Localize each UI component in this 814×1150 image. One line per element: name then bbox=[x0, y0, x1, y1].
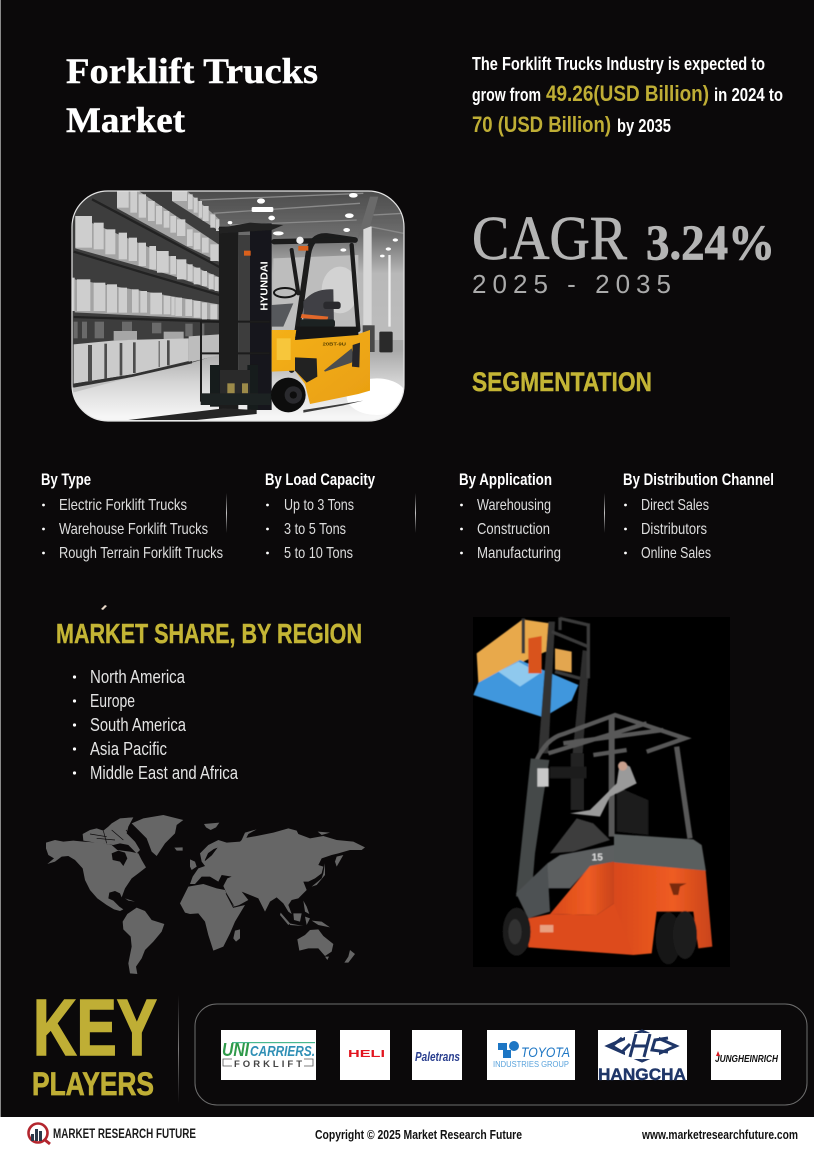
columns and wall bbox=[273, 255, 358, 272]
logo: Toyota Industries bbox=[487, 1030, 575, 1080]
seat bbox=[303, 289, 334, 320]
logo: Hangcha bbox=[598, 1030, 687, 1084]
title bbox=[66, 51, 318, 140]
segmentation column: by load capacity bbox=[265, 470, 375, 562]
wheels bbox=[503, 908, 531, 956]
segmentation column: by type: Warehouse Forklift Trucks bbox=[59, 521, 208, 538]
cab post and body bbox=[516, 758, 549, 897]
logo: Paletrans: Paletrans bbox=[415, 1049, 460, 1064]
segmentation column: by type: Electric Forklift Trucks bbox=[59, 497, 187, 514]
wheel bbox=[271, 378, 306, 412]
floor pallets bbox=[189, 334, 219, 363]
logo: UniCarriers: FORKLIFT bbox=[234, 1059, 302, 1070]
logo: Toyota Industries: INDUSTRIES GROUP bbox=[493, 1060, 569, 1069]
segmentation column: by distribution channel: By Distribution Channel bbox=[623, 470, 774, 489]
logo: Toyota Industries: TOYOTA bbox=[521, 1044, 570, 1060]
warehouse racks bbox=[72, 191, 219, 388]
region list: North America bbox=[90, 667, 186, 687]
segmentation column: by distribution channel: Direct Sales bbox=[641, 497, 709, 514]
region list bbox=[73, 667, 239, 783]
overhead guard bbox=[274, 236, 358, 370]
segmentation column: by distribution channel: Online Sales bbox=[641, 545, 711, 562]
segmentation column: by application: Construction bbox=[477, 521, 550, 538]
heading: market share by region: MARKET SHARE, BY REGION bbox=[56, 618, 362, 649]
ceiling beams bbox=[200, 193, 403, 233]
segmentation column: by distribution channel: Distributors bbox=[641, 521, 707, 538]
segmentation column: by type bbox=[41, 470, 223, 562]
footer band bbox=[0, 1117, 814, 1150]
logo: UniCarriers: CARRIERS. bbox=[250, 1043, 315, 1060]
title: Forklift Trucks bbox=[66, 51, 318, 91]
segmentation column: by application: Manufacturing bbox=[477, 545, 561, 562]
intro text: market forecast: 49.26(USD Billion) bbox=[546, 81, 709, 106]
segmentation column: by load capacity: By Load Capacity bbox=[265, 470, 375, 489]
logo: UniCarriers bbox=[221, 1030, 316, 1080]
ceiling lights bbox=[228, 193, 398, 257]
driver and seat bbox=[617, 787, 648, 835]
panel: key player logos bbox=[195, 1004, 807, 1105]
CAGR statistic bbox=[472, 205, 775, 299]
segmentation column: by distribution channel bbox=[623, 470, 774, 562]
load bbox=[477, 619, 553, 683]
CAGR statistic: 2025 - 2035 bbox=[472, 269, 671, 299]
region list: Middle East and Africa bbox=[90, 763, 239, 783]
photo: Hyundai forklift in warehouse: HYUNDAI bbox=[260, 261, 271, 311]
mast bbox=[219, 227, 238, 410]
intro text: market forecast: in 2024 to bbox=[714, 85, 783, 105]
photo: Hyundai forklift in warehouse: 20BT-9U bbox=[323, 342, 346, 348]
photo: Hyundai forklift in warehouse bbox=[70, 188, 407, 425]
logo: Jungheinrich bbox=[711, 1030, 781, 1080]
logo: Market Research Future: MARKET RESEARCH FUTURE bbox=[53, 1126, 196, 1141]
CAGR statistic: 3.24% bbox=[646, 214, 775, 270]
region list: Europe bbox=[90, 691, 135, 711]
heading: key players: KEY bbox=[33, 983, 157, 1072]
CAGR statistic: CAGR bbox=[472, 205, 628, 273]
floor bbox=[70, 340, 407, 425]
carriage and forks bbox=[200, 320, 250, 402]
logo: Market Research Future bbox=[28, 1124, 196, 1144]
intro text: market forecast: grow from bbox=[472, 85, 541, 105]
intro text: market forecast: by 2035 bbox=[617, 116, 671, 136]
logo: UniCarriers: UNI bbox=[222, 1040, 250, 1060]
segmentation column: by application: Warehousing bbox=[477, 497, 551, 514]
logo: Hangcha: HANGCHA bbox=[598, 1065, 686, 1084]
segmentation column: by load capacity: Up to 3 Tons bbox=[284, 497, 354, 514]
segmentation column: by load capacity: 3 to 5 Tons bbox=[284, 521, 346, 538]
heading: key players: PLAYERS bbox=[32, 1066, 154, 1102]
intro text: market forecast bbox=[472, 54, 783, 137]
region list: South America bbox=[90, 715, 187, 735]
mast bbox=[538, 622, 555, 753]
segmentation column: by type: By Type bbox=[41, 470, 91, 489]
segmentation column: by application bbox=[459, 470, 561, 562]
segmentation column: by application: By Application bbox=[459, 470, 552, 489]
title: Market bbox=[66, 100, 185, 140]
segmentation column: by load capacity: 5 to 10 Tons bbox=[284, 545, 353, 562]
body bbox=[272, 330, 370, 404]
heading: key players bbox=[32, 983, 157, 1102]
photo: Toyota forklift on black: 15 bbox=[592, 853, 603, 864]
logo: Paletrans bbox=[412, 1030, 462, 1080]
logo: Heli: HELI bbox=[348, 1049, 385, 1060]
logo: Jungheinrich: JUNGHEINRICH bbox=[715, 1054, 779, 1065]
heading: segmentation: SEGMENTATION bbox=[472, 367, 652, 397]
copyright: Copyright © 2025 Market Research Future bbox=[315, 1127, 522, 1142]
bins bbox=[379, 332, 393, 352]
region list: Asia Pacific bbox=[90, 739, 167, 759]
segmentation column: by type: Rough Terrain Forklift Trucks bbox=[59, 545, 223, 562]
lower bay panels bbox=[74, 322, 204, 338]
intro text: market forecast: 70 (USD Billion) bbox=[472, 112, 611, 137]
rack beams bbox=[74, 199, 219, 322]
photo: Toyota forklift on black bbox=[473, 617, 730, 967]
overhead guard bbox=[537, 715, 690, 838]
photo frame bbox=[72, 191, 404, 421]
logo: Heli bbox=[340, 1030, 390, 1080]
world map bbox=[46, 815, 365, 974]
